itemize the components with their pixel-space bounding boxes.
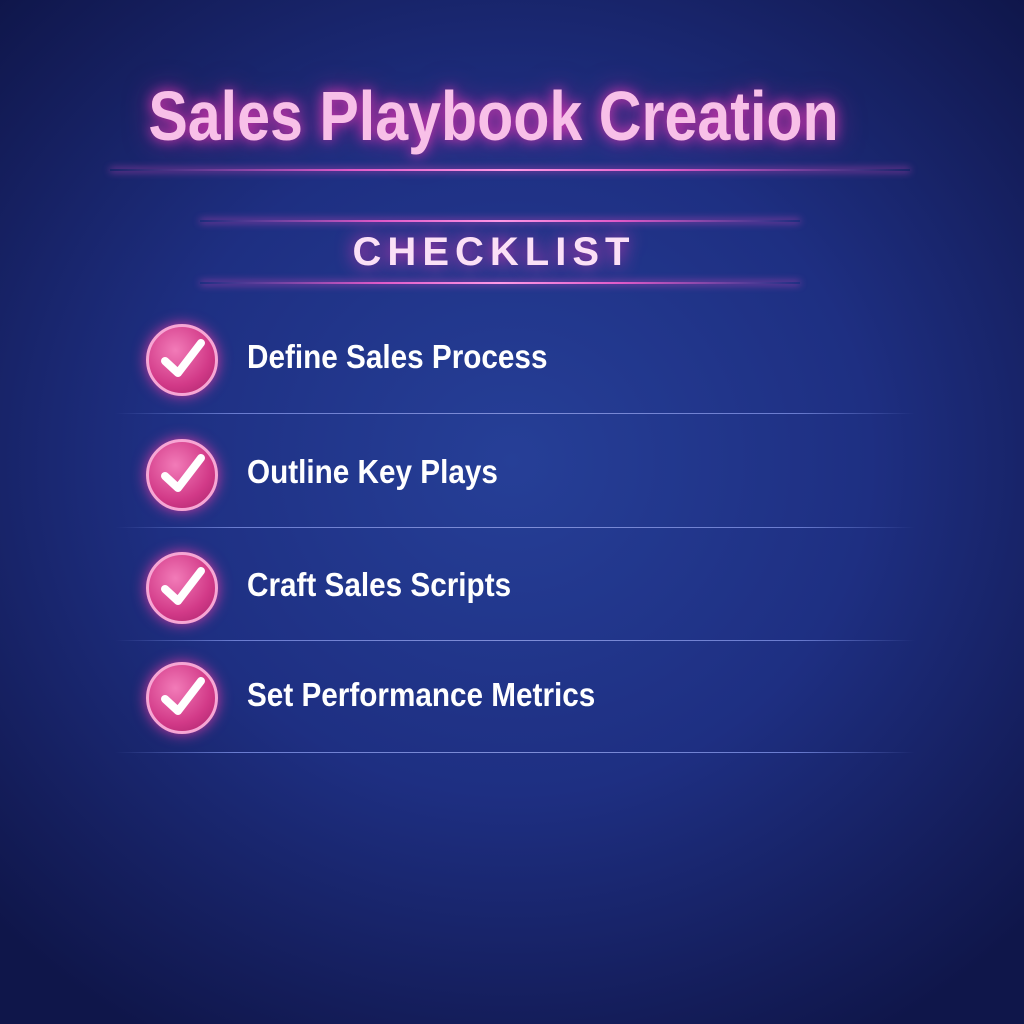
icon: check circle <box>146 439 218 511</box>
text: Define Sales Process <box>247 338 547 375</box>
heading: checklist: CHECKLIST <box>353 230 635 274</box>
text: Craft Sales Scripts <box>247 566 511 603</box>
checklist item 4 <box>136 652 595 744</box>
checklist item 2 <box>136 428 498 522</box>
text: Set Performance Metrics <box>247 676 595 713</box>
icon: check circle <box>146 324 218 396</box>
icon: check circle <box>146 662 218 734</box>
title: Sales Playbook Creation <box>148 77 838 155</box>
icon: check circle <box>146 552 218 624</box>
checklist item 3 <box>136 542 511 634</box>
checklist item 1 <box>136 314 547 406</box>
text: Outline Key Plays <box>247 453 498 490</box>
